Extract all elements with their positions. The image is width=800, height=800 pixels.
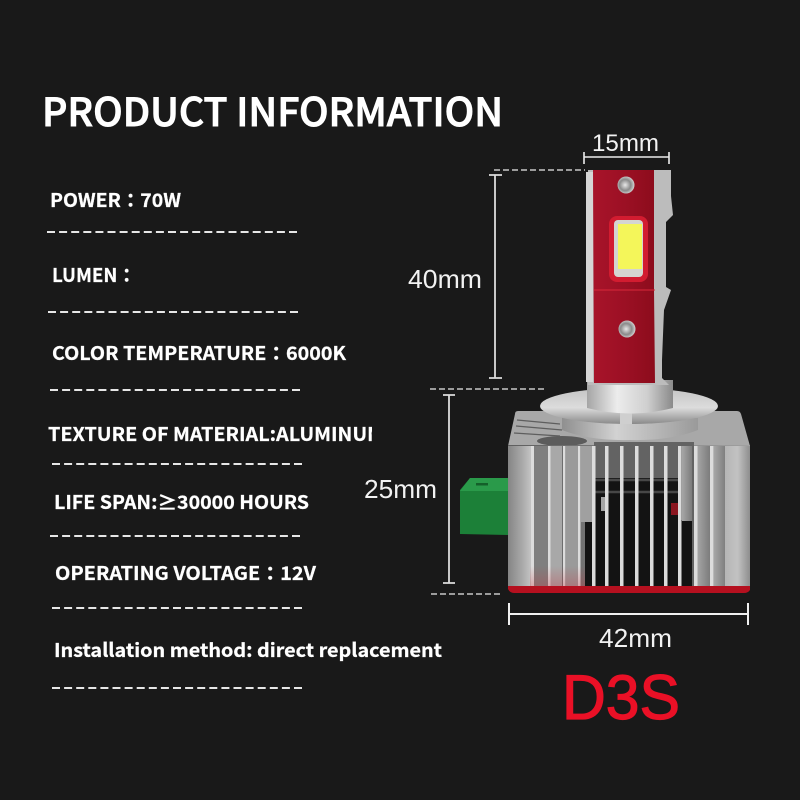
spec list [48, 186, 442, 663]
bottom screw [618, 320, 636, 338]
spec: operating voltage: OPERATING VOLTAGE：12V [55, 559, 316, 586]
dimension: 15mm [584, 130, 669, 164]
red plate [593, 170, 655, 383]
dimension: 25mm: 25mm [364, 474, 437, 504]
green connector [460, 478, 508, 535]
spec: installation method: Installation method: direct replacement [54, 636, 442, 663]
spec: material: TEXTURE OF MATERIAL:ALUMINUM [48, 420, 384, 447]
dimension: 42mm [509, 603, 748, 653]
top screw [618, 176, 634, 194]
center shaded fins [594, 442, 694, 586]
spec: lumen: LUMEN： [52, 261, 136, 288]
model label: D3S [562, 663, 680, 733]
product: D3S LED bulb [460, 170, 750, 593]
spec: color temperature: COLOR TEMPERATURE：6000K [52, 339, 347, 366]
spec: power: POWER：70W [50, 186, 181, 213]
dimension: 40mm [408, 170, 585, 389]
dimension: 15mm: 15mm [592, 130, 659, 157]
dimension: 25mm [364, 395, 502, 594]
heat sink body [508, 411, 750, 593]
dark window [585, 478, 692, 586]
metal flange [540, 380, 718, 440]
dimension: 40mm: 40mm [408, 264, 482, 294]
LED head [586, 170, 673, 385]
right fin group [682, 446, 726, 586]
right end block [725, 446, 750, 588]
spec: life span: LIFE SPAN:≥30000 HOURS [54, 488, 309, 515]
LED chip [609, 216, 648, 282]
title: PRODUCT INFORMATION [42, 82, 503, 138]
left end block [508, 446, 531, 588]
dimension: 42mm: 42mm [599, 623, 672, 653]
